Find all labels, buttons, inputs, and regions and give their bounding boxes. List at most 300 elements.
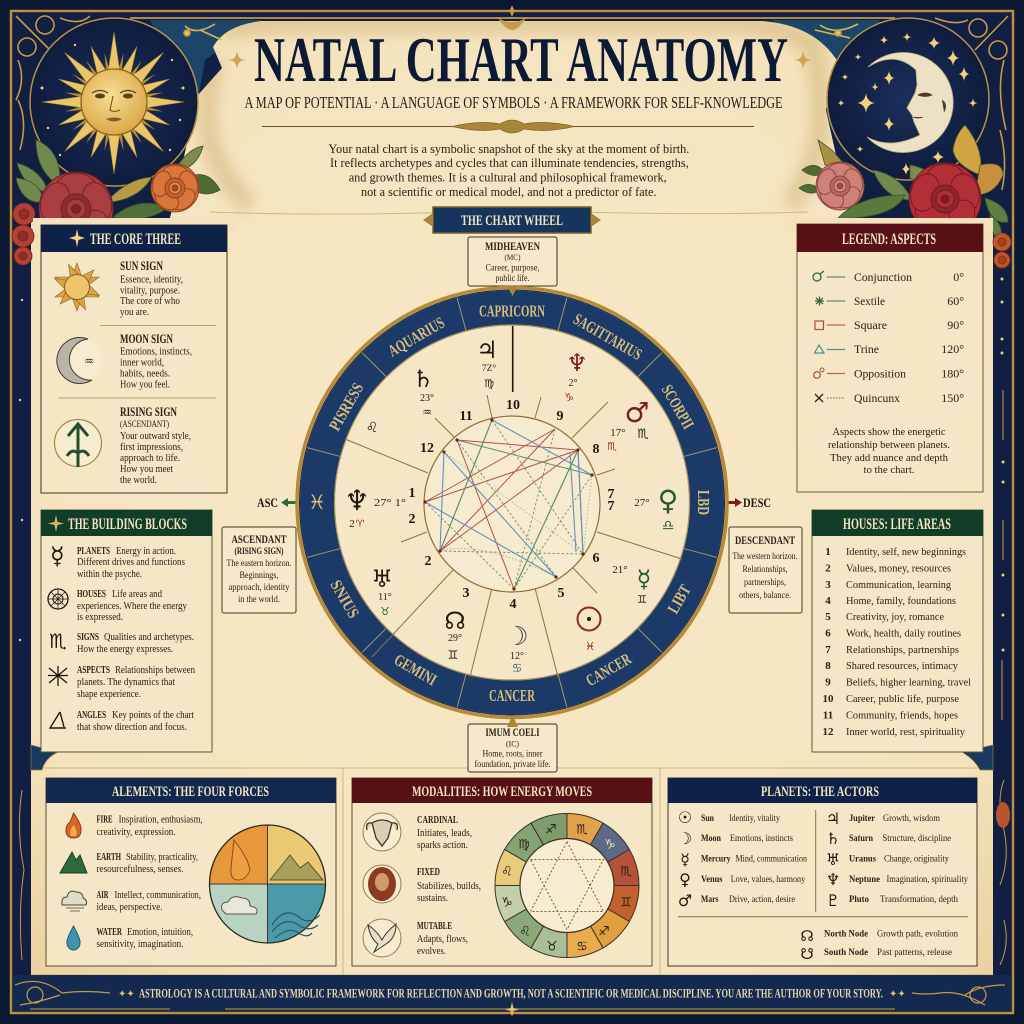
footer band (13, 975, 1011, 1017)
earth: Stability, practicality, (126, 852, 198, 863)
intro paragraph: It reflects archetypes and cycles that can illuminate tendencies, strengths, (330, 156, 689, 170)
callout: descendant: DESCENDANT (735, 533, 795, 547)
quincunx row: Quincunx (854, 391, 900, 405)
element wheel (210, 825, 326, 943)
earth: resourcefulness, senses. (96, 864, 184, 875)
pluto: ♆ (566, 349, 588, 377)
right planet column: ♅ (826, 850, 840, 869)
houses (48, 589, 187, 623)
mercury: ☿ (637, 565, 651, 593)
air: ideas, perspective. (96, 902, 162, 913)
water: sensitivity, imagination. (96, 939, 184, 950)
mutable: evolves. (417, 946, 446, 957)
house list: 6 (825, 628, 831, 640)
quincunx row (815, 391, 964, 405)
zodiac sign labels: SNIUS (326, 576, 363, 622)
left planet column: Venus (701, 874, 723, 885)
uranus: ♉ (380, 605, 390, 618)
callout: descendant: The western horizon. (732, 552, 798, 562)
house list: Identity, self, new beginnings (846, 546, 966, 558)
fire: creativity, expression. (96, 827, 176, 838)
zodiac sign labels: ♓ (308, 490, 326, 514)
left planet column: Mercury (701, 854, 731, 864)
note (828, 427, 950, 476)
cardinal (363, 813, 472, 851)
zodiac sign labels: CANCER (583, 649, 635, 690)
rose: crimson (36, 172, 116, 250)
medallion stars (40, 44, 184, 156)
sextile row (815, 294, 964, 308)
house numbers: 10 (506, 398, 520, 413)
rising sign: RISING SIGN (120, 405, 177, 419)
side strip stars and vines (19, 278, 1010, 965)
angles: ANGLES (77, 710, 106, 721)
cardinal: CARDINAL (417, 815, 458, 826)
heading (41, 225, 227, 252)
house list: Values, money, resources (846, 562, 951, 574)
planets: Different drives and functions (77, 557, 185, 568)
callout: descendant (729, 527, 802, 613)
opposition row (814, 366, 964, 380)
trine row: 120° (941, 342, 964, 356)
left planet column: ☿ (680, 850, 690, 869)
zodiac sign labels: AQUARIUS (385, 313, 448, 360)
left planet column: Sun (701, 813, 714, 824)
right planet column: ♆ (826, 870, 840, 889)
north node: 29° (448, 633, 462, 644)
fixed (363, 865, 481, 904)
modality zodiac wheel: ♐ (545, 822, 557, 838)
rising sign: approach to life. (120, 453, 180, 464)
rose: orange (149, 164, 201, 214)
north node: ♊ (448, 648, 458, 662)
moon: ☽ (505, 622, 529, 652)
sextile row: 60° (947, 294, 964, 308)
jupiter (476, 336, 498, 390)
leaves (799, 125, 1008, 240)
axis label: DESC with arrow: DESC (743, 496, 771, 510)
planet placements (344, 336, 678, 675)
modality zodiac wheel: ♌ (501, 864, 513, 880)
houses: Life areas and (112, 589, 162, 600)
heading: PLANETS: THE ACTORS (761, 784, 879, 800)
earth (60, 852, 198, 875)
left planet column: ☽ (678, 829, 692, 848)
cardinal: sparks action. (417, 840, 468, 851)
moon sign: MOON SIGN (120, 332, 173, 346)
callout: descendant: partnerships, (744, 578, 786, 588)
callout: imum coeli: (IC) (506, 738, 519, 748)
footer band: ✦✦ (889, 989, 906, 1000)
ornamental divider (262, 120, 754, 133)
heading: MODALITIES: HOW ENERGY MOVES (412, 784, 592, 800)
callout: midheaven: MIDHEAVEN (485, 241, 541, 253)
pluto: 2° (568, 378, 578, 389)
modality zodiac wheel: ♋ (576, 940, 588, 954)
moon stars (837, 32, 978, 175)
quincunx row: 150° (941, 391, 964, 405)
aspects: shape experience. (77, 689, 141, 700)
chart wheel (297, 286, 727, 727)
venus (634, 484, 678, 534)
mars: ♂ (624, 396, 650, 429)
lunar nodes: North Node (824, 929, 869, 940)
house list (822, 546, 971, 738)
venus: ♀ (658, 484, 678, 517)
house numbers: 8 (592, 442, 600, 457)
sun sign (44, 254, 183, 320)
house list: Work, health, daily routines (846, 628, 961, 640)
neptune: ♈ (356, 519, 365, 530)
left planet column: Love, values, harmony (731, 874, 805, 885)
parchment panel tops over the flowers (33, 218, 993, 232)
fixed: FIXED (417, 867, 440, 878)
air: Intellect, communication, (114, 890, 201, 901)
section banner: the chart wheel (423, 207, 601, 233)
aspects (48, 665, 195, 700)
sun sign: SUN SIGN (120, 259, 163, 273)
sun sign: vitality, purpose. (120, 286, 180, 296)
callout: ascendant: approach, identity (228, 583, 290, 593)
section banner: the chart wheel: THE CHART WHEEL (461, 213, 563, 229)
right planet column: Jupiter (849, 813, 876, 824)
saturn: ♒ (422, 406, 432, 419)
zodiac sign labels: PISRESS (325, 379, 367, 434)
right planet column: Neptune (849, 874, 881, 885)
callout: midheaven: (MC) (504, 252, 521, 262)
corner flourish: top right (815, 16, 1008, 190)
moon sign: inner world, (120, 358, 164, 368)
zodiac sign labels: GEMINI (391, 650, 440, 689)
right planet column: Uranus (849, 854, 876, 864)
house list: 9 (825, 676, 831, 688)
house list: 12 (822, 726, 834, 738)
planets (50, 542, 185, 580)
left planet column: Drive, action, desire (729, 894, 796, 905)
uranus: ♅ (371, 565, 393, 593)
house list: Home, family, foundations (846, 595, 956, 607)
water: Emotion, intuition, (127, 927, 193, 938)
top ornament (498, 5, 526, 30)
heading (352, 778, 652, 803)
house list: Career, public life, purpose (846, 693, 959, 705)
title sparkles (229, 52, 811, 68)
heading (41, 510, 212, 536)
mutable (363, 919, 468, 957)
modality zodiac wheel: ♌ (519, 924, 531, 940)
left planet column: ♀ (679, 870, 691, 889)
right planet column: ♄ (826, 829, 840, 848)
house list: Shared resources, intimacy (846, 660, 958, 672)
right planet column: Saturn (849, 833, 873, 844)
heading: THE BUILDING BLOCKS (68, 516, 187, 533)
zodiac sign labels: LBD (694, 490, 713, 515)
house numbers: 2 (408, 512, 416, 527)
left planet column: ♂ (678, 891, 692, 910)
house list: Beliefs, higher learning, travel (846, 676, 971, 688)
mars: ♏ (607, 440, 617, 453)
saturn (412, 365, 434, 419)
axis label: ASC with arrow: ASC (257, 496, 278, 510)
rising sign: Your outward style, (120, 431, 191, 442)
right planet column: Structure, discipline (882, 833, 952, 844)
conjunction row (813, 270, 964, 284)
jupiter: ♍ (484, 377, 494, 390)
leaves (16, 140, 220, 219)
fire: FIRE (96, 815, 112, 826)
angles: Key points of the chart (112, 710, 194, 721)
heading (797, 224, 983, 252)
rising sign (54, 405, 191, 486)
axis label: DESC with arrow (726, 496, 771, 510)
angles: that show direction and focus. (77, 722, 187, 733)
fire: Inspiration, enthusiasm, (119, 815, 203, 826)
modality zodiac wheel: ♏ (620, 864, 632, 880)
moon: 12° (510, 651, 524, 662)
crescent moon face (867, 53, 953, 153)
air (62, 890, 201, 913)
house numbers: 5 (558, 586, 564, 601)
callout: imum coeli (468, 724, 557, 772)
angles (50, 710, 194, 733)
left planet column: Moon (701, 833, 721, 844)
sun rays (42, 32, 184, 174)
conjunction row: Conjunction (854, 270, 912, 284)
house list: 4 (825, 595, 831, 607)
opposition row: Opposition (854, 366, 906, 380)
modality zodiac wheel: ♍ (518, 838, 530, 852)
north node (444, 607, 466, 662)
left planet column: Emotions, instincts (730, 833, 793, 844)
lunar nodes: ☊ (800, 927, 814, 945)
heading: ALEMENTS: THE FOUR FORCES (112, 784, 269, 800)
modality zodiac wheel: ♑ (604, 838, 616, 852)
corner flourish: top left (16, 16, 222, 150)
right planet column: Imagination, spirituality (886, 874, 968, 885)
callout: ascendant: in the world. (238, 595, 280, 605)
lunar nodes: Past patterns, release (877, 947, 953, 958)
callout: descendant: Relationships, (742, 565, 788, 575)
houses: HOUSES (77, 589, 106, 600)
neptune: 2 (349, 518, 355, 530)
subtitle: A MAP OF POTENTIAL · A LANGUAGE OF SYMBOLS · A FRAMEWORK FOR SELF-KNOWLEDGE (244, 93, 782, 112)
sun medallion (30, 18, 198, 186)
callout: ascendant: ASCENDANT (232, 532, 286, 546)
moon sign (55, 332, 192, 390)
house numbers: 2 (424, 554, 432, 569)
opposition row: 180° (941, 366, 964, 380)
house list: Inner world, rest, spirituality (846, 726, 965, 738)
mars (607, 396, 650, 453)
uranus: 11° (378, 592, 392, 603)
rising sign: the world. (120, 475, 157, 486)
sun: ♓ (585, 640, 595, 653)
callout: ascendant (222, 527, 296, 613)
house list: 3 (825, 579, 831, 591)
zodiac sign labels: CAPRICORN (479, 302, 545, 320)
uranus (371, 565, 393, 618)
aspect grid (423, 416, 600, 592)
left planet column: Identity, vitality (729, 813, 780, 824)
left planet column (678, 808, 807, 910)
mars: 17° (610, 427, 626, 439)
rose: small left (12, 203, 35, 265)
note: They add nuance and depth (830, 453, 949, 464)
sun face (81, 69, 147, 135)
sun sign: The core of who (120, 296, 180, 307)
pluto: ♑ (564, 391, 574, 404)
note: Aspects show the energetic (832, 427, 946, 438)
zodiac sign labels: CANCER (489, 686, 536, 705)
zodiac ring (297, 288, 727, 718)
zodiac sign labels: SCORPII (658, 381, 698, 432)
rose: pink (814, 162, 866, 212)
fixed: Stabilizes, builds, (417, 881, 481, 892)
fire (66, 813, 203, 838)
sun sign: Essence, identity, (120, 274, 183, 286)
jupiter: ♃ (476, 336, 498, 364)
intro paragraph: and growth themes. It is a cultural and philosophical framework, (349, 170, 667, 184)
callout: descendant: others, balance. (739, 591, 791, 601)
panel: the building blocks (41, 510, 212, 752)
aspects: planets. The dynamics that (77, 677, 175, 688)
heading: THE CORE THREE (90, 231, 181, 248)
planets: PLANETS (77, 546, 110, 557)
callout: imum coeli: foundation, private life. (474, 759, 550, 770)
right planet column: Transformation, depth (880, 894, 958, 905)
note: relationship between planets. (828, 440, 950, 451)
modality zodiac wheel: ♐ (598, 924, 610, 940)
mercury (612, 564, 651, 606)
cardinal: Initiates, leads, (417, 828, 472, 839)
saturn: ♄ (412, 365, 434, 393)
rose: crimson right (906, 163, 984, 238)
modality zodiac wheel: ♑ (501, 896, 513, 910)
panel: elements (46, 778, 336, 966)
house list: Community, friends, hopes (846, 710, 958, 722)
modality zodiac wheel (495, 813, 639, 958)
house numbers (408, 398, 614, 612)
venus: ♎ (662, 518, 674, 534)
moon (505, 622, 529, 675)
intro paragraph: not a scientific or medical model, and not a predictor of fate. (361, 185, 656, 199)
leo mark: ♌ (366, 420, 378, 436)
zodiac sign labels (308, 302, 713, 705)
axis label: ASC with arrow (257, 496, 297, 510)
panel: houses life areas (812, 510, 983, 752)
house list: Creativity, joy, romance (846, 611, 944, 623)
zodiac sign labels: SAGITTARIUS (570, 309, 645, 364)
midheaven axis (512, 326, 514, 392)
house numbers: 3 (462, 586, 470, 601)
lunar nodes (800, 927, 958, 963)
house numbers: 9 (556, 409, 564, 424)
signs: How the energy expresses. (77, 644, 173, 655)
saturn: 23° (420, 393, 434, 404)
fixed: sustains. (417, 893, 448, 904)
square row: 90° (947, 318, 964, 332)
house list: 7 (825, 644, 831, 656)
water (67, 926, 193, 950)
neptune: ♆ (344, 484, 370, 517)
panel: the core three (41, 225, 227, 493)
sun (578, 608, 600, 653)
axis ornaments (507, 286, 518, 727)
mars: ♏ (637, 427, 649, 442)
moon sign: ♒ (84, 355, 94, 368)
house list: 5 (825, 611, 831, 623)
water: WATER (96, 927, 122, 938)
air: AIR (96, 890, 109, 901)
right planet column: Growth, wisdom (883, 813, 940, 824)
house numbers: 4 (510, 597, 516, 612)
signs: SIGNS (77, 632, 99, 643)
heading: HOUSES: LIFE AREAS (843, 516, 951, 533)
panel: planets (668, 778, 977, 966)
callout: midheaven (468, 237, 557, 286)
house numbers: 11 (459, 409, 473, 424)
callout: midheaven: Career, purpose, (486, 264, 540, 274)
flowers: right (799, 125, 1011, 268)
right planet column (826, 809, 968, 910)
planets: ☿ (50, 542, 65, 570)
modality zodiac wheel: ♏ (576, 822, 588, 838)
flowers: left (12, 140, 220, 265)
house numbers: 7 (608, 499, 614, 514)
callout: imum coeli: Home, roots, inner (482, 750, 543, 760)
house list: Communication, learning (846, 579, 951, 591)
moon: ♋ (512, 661, 522, 675)
sextile row: Sextile (854, 294, 885, 308)
intro paragraph (328, 142, 689, 199)
right planet column: ♃ (826, 809, 840, 828)
house numbers: 12 (420, 441, 434, 456)
moon medallion (827, 18, 989, 180)
zodiac sign labels: LIBT (663, 581, 695, 617)
moon sign: Emotions, instincts, (120, 346, 192, 358)
rising sign: first impressions, (120, 442, 183, 453)
callout: ascendant: The eastern horizon. (226, 559, 292, 569)
lunar nodes: Growth path, evolution (877, 929, 958, 940)
heading (668, 778, 977, 803)
lunar nodes: ☋ (800, 945, 814, 963)
callout: ascendant: (RISING SIGN) (234, 546, 284, 557)
left planet column: Mars (701, 894, 719, 905)
venus: 27° (634, 497, 650, 509)
heading (46, 778, 336, 803)
conjunction row: 0° (953, 270, 964, 284)
house list: Relationships, partnerships (846, 644, 959, 656)
callout: ascendant: Beginnings, (240, 571, 278, 581)
mutable: Adapts, flows, (417, 934, 468, 945)
heading (812, 510, 983, 536)
panel dividers (31, 210, 993, 975)
planets: Energy in action. (116, 546, 176, 557)
cartouche edge shading (207, 24, 822, 205)
house list: 2 (825, 562, 831, 574)
north node: ☊ (444, 607, 466, 635)
mercury: ♊ (637, 593, 647, 606)
heading: LEGEND: ASPECTS (842, 231, 936, 248)
square row (815, 318, 964, 332)
rising sign: (ASCENDANT) (120, 419, 169, 430)
lunar nodes: South Node (824, 947, 869, 958)
jupiter: 7Z° (482, 363, 496, 374)
houses: is expressed. (77, 612, 123, 623)
rose: small right (993, 233, 1011, 268)
house cusp lines (345, 395, 682, 677)
panel: modalities (352, 778, 652, 966)
